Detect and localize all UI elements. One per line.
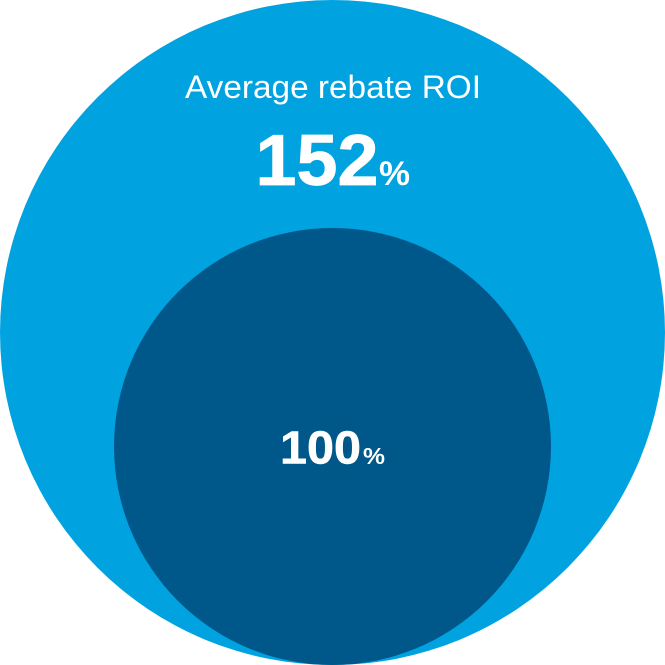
- label: Average rebate ROI: Average rebate ROI: [185, 69, 481, 105]
- value: 100%: %: [363, 443, 385, 469]
- value: 152%: %: [379, 155, 410, 193]
- value: 152%: 152: [256, 121, 378, 201]
- inner circle: 100% baseline: [114, 228, 551, 665]
- value: 100%: 100: [280, 422, 361, 474]
